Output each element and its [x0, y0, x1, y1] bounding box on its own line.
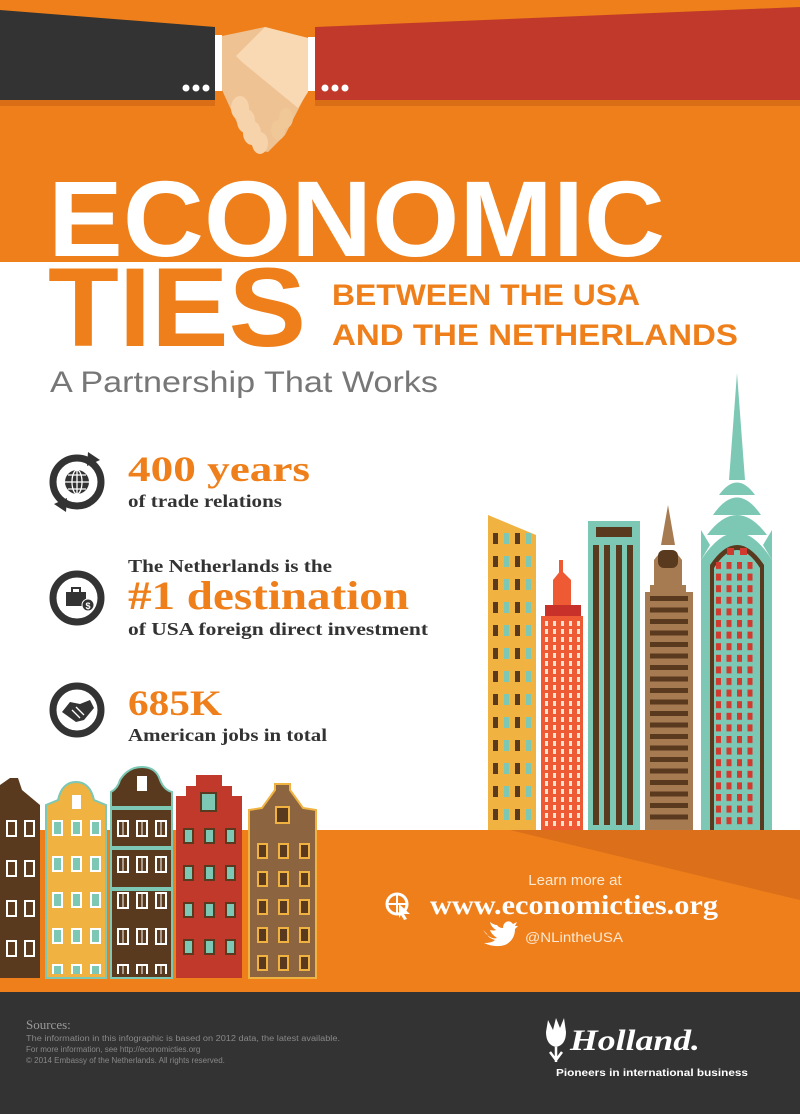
stat: 400 years: of trade relations [128, 491, 282, 511]
building: orange-red [541, 560, 583, 830]
call to action: website: @NLintheUSA [525, 929, 624, 945]
house 5 [249, 784, 316, 978]
stat: #1 destination [53, 556, 428, 639]
call to action: website [387, 872, 719, 946]
stat: #1 destination: of USA foreign direct investment [128, 619, 428, 639]
stat: #1 destination: #1 destination [128, 573, 409, 618]
subtitle: BETWEEN THE USA [332, 279, 640, 312]
handshake illustration [0, 7, 800, 154]
stat: 685K jobs [53, 683, 327, 745]
footer: Holland logo: Holland. [569, 1024, 700, 1057]
building: teal striped [588, 521, 640, 830]
title: ECONOMIC: ECONOMIC [48, 158, 665, 279]
stat: 400 years [53, 449, 310, 512]
background: orange top band [0, 0, 800, 262]
building: brown tower [645, 505, 693, 830]
skyline: US skyscrapers [488, 373, 772, 830]
subtitle [332, 279, 738, 352]
subtitle: AND THE NETHERLANDS [332, 319, 738, 352]
icon: handshake [53, 686, 101, 734]
icon: tulip [546, 1018, 566, 1062]
icon: briefcase with dollar: $ [85, 601, 91, 611]
footer: Holland logo [546, 1018, 749, 1079]
stat: #1 destination: The Netherlands is the [128, 556, 332, 576]
icon: twitter bird [483, 921, 518, 946]
houses: Dutch canal houses [0, 767, 316, 978]
house 3 [111, 767, 172, 978]
footer: sources [26, 1017, 340, 1065]
sleeve: left dark [0, 10, 222, 106]
stat: 400 years: 400 years [128, 449, 310, 489]
sleeve: right red [308, 7, 800, 106]
icon: globe with arrows [53, 452, 101, 512]
building: yellow slanted [488, 515, 536, 830]
house 2 [46, 782, 106, 978]
footer: Holland logo: Pioneers in international business [556, 1068, 749, 1079]
tagline: A Partnership That Works [50, 366, 438, 399]
footer: sources: For more information, see http://economicties.org [26, 1045, 200, 1054]
call to action: website: Learn more at [528, 872, 623, 889]
title: TIES: TIES [48, 245, 306, 370]
building: Chrysler [701, 373, 772, 830]
footer background [0, 992, 800, 1114]
house 1 [0, 778, 40, 978]
hands [222, 27, 308, 154]
footer: sources: Sources: [26, 1017, 71, 1032]
footer: sources: The information in this infographic is based on 2012 data, the latest available. [26, 1034, 340, 1043]
icon: briefcase with dollar [53, 574, 101, 622]
icon: globe cursor [387, 894, 410, 920]
house 4 [176, 775, 242, 978]
call to action: website: www.economicties.org [430, 890, 719, 920]
stat: 685K jobs: 685K [128, 683, 222, 723]
background: orange bottom band [0, 830, 800, 992]
stat: 685K jobs: American jobs in total [128, 725, 327, 745]
footer: sources: © 2014 Embassy of the Netherlands. All rights reserved. [26, 1056, 225, 1065]
